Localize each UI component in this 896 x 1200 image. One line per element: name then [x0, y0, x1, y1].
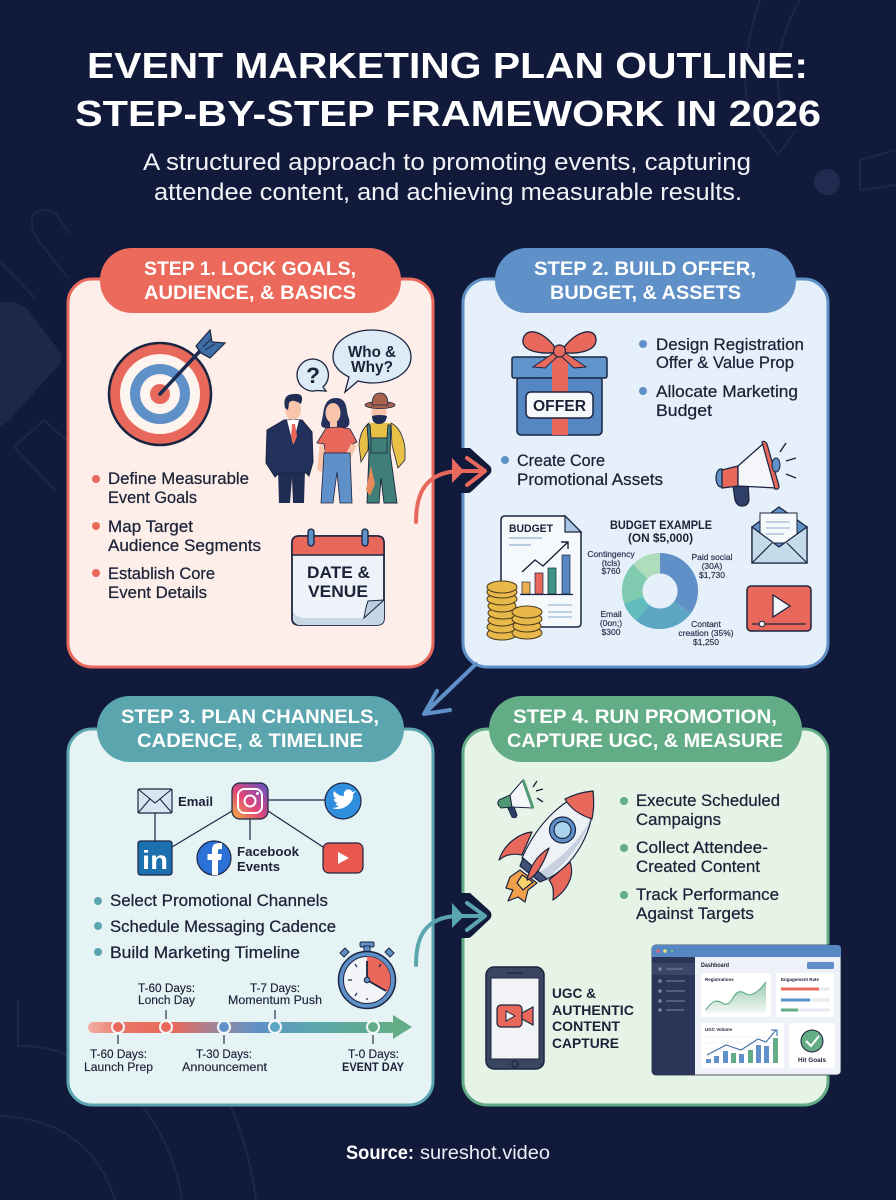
step 1 heading: AUDIENCE, & BASICS [144, 282, 356, 304]
bullet list: step 2 offer and budget: Budget [656, 401, 712, 420]
icon: stopwatch [338, 942, 396, 1008]
dashboard window: Dashboard [701, 962, 729, 969]
chart: marketing timeline: T-60 Days: [138, 983, 195, 995]
icon: calendar date and venue [292, 529, 384, 625]
icon: instagram [232, 783, 268, 819]
chart: budget donut: $300 [602, 627, 621, 637]
panel: step 4 [463, 696, 841, 1105]
text: ugc label [552, 985, 634, 1051]
chart: budget donut: Contant [691, 619, 722, 629]
icon: speech bubbles: Who & [348, 344, 396, 361]
panel: step 1 [68, 248, 433, 667]
icon: gift box offer [512, 332, 607, 435]
icon: target with arrow [109, 330, 225, 445]
chart: marketing timeline: T-7 Days: [250, 983, 300, 995]
step 2 heading [495, 248, 796, 313]
dashboard window [652, 945, 841, 1075]
icon: budget document with chart: BUDGET [509, 523, 553, 535]
text: ugc label: CAPTURE [552, 1035, 619, 1051]
bullet: create assets: Create Core [517, 451, 605, 470]
panel: step 2 [463, 248, 828, 667]
chart: marketing timeline [84, 983, 412, 1074]
bullet list: step 3 [94, 891, 336, 962]
chart: budget donut: creation (35%) [678, 628, 734, 638]
icon: small green megaphone [498, 780, 543, 818]
icon: rocket [499, 791, 594, 902]
step 2 heading: BUDGET, & ASSETS [550, 282, 741, 304]
icon: speech bubbles: ? [306, 363, 320, 388]
bullet list: step 2 offer and budget: Allocate Marketing [656, 382, 798, 401]
title: STEP-BY-STEP FRAMEWORK IN 2026 [75, 93, 821, 134]
step 4 heading [489, 696, 802, 762]
icon: facebook events [197, 841, 300, 875]
step 4 heading: STEP 4. RUN PROMOTION, [513, 706, 777, 728]
icon: gift box offer: OFFER [533, 398, 586, 415]
icon: email [138, 789, 213, 813]
dashboard card: engagement: Engagement Rate [781, 977, 820, 982]
icon: email: Email [178, 794, 213, 809]
bullet list: step 1: Audience Segments [108, 536, 261, 555]
chart: marketing timeline: Launch Prep [84, 1062, 153, 1074]
text: ugc label: CONTENT [552, 1018, 620, 1034]
chart: budget donut: Email [600, 609, 622, 619]
bullet list: step 4: Collect Attendee- [636, 838, 768, 857]
chart: budget donut: (30A) [702, 561, 723, 571]
bullet list: step 1: Event Goals [108, 488, 197, 507]
chart: marketing timeline: Announcement [182, 1062, 268, 1074]
step 1 heading: STEP 1. LOCK GOALS, [144, 258, 356, 280]
chart: marketing timeline: EVENT DAY [342, 1062, 404, 1074]
bullet list: step 1: Establish Core [108, 564, 215, 583]
title: EVENT MARKETING PLAN OUTLINE: [87, 45, 808, 86]
dashboard card: ugc volume [701, 1023, 784, 1068]
step 3 heading: STEP 3. PLAN CHANNELS, [121, 706, 379, 728]
bullet list: step 4: Created Content [636, 857, 760, 876]
chart: budget donut: Contingency [587, 549, 635, 559]
chart: budget donut: BUDGET EXAMPLE [610, 520, 712, 532]
source credit [346, 1143, 550, 1164]
icon: speech bubbles: Why? [351, 359, 393, 376]
subtitle: A structured approach to promoting events, capturing [143, 149, 751, 176]
chart: marketing timeline: T-60 Days: [90, 1049, 147, 1061]
step 1 heading [100, 248, 401, 313]
chart: marketing timeline: T-30 Days: [196, 1049, 252, 1061]
bullet list: step 2 offer and budget [639, 335, 804, 420]
source credit: sureshot.video [420, 1143, 550, 1164]
dashboard card: engagement [776, 973, 834, 1017]
chart: budget donut: $760 [602, 566, 621, 576]
dashboard card: registrations: Registrations [705, 977, 734, 982]
icon: budget document with chart [501, 516, 581, 627]
icon: calendar date and venue: VENUE [308, 583, 368, 601]
icon: linkedin: in [142, 845, 168, 875]
step 3 heading [97, 696, 404, 762]
icon: speech bubbles [297, 330, 411, 392]
bullet: create assets [501, 451, 663, 489]
dashboard card: hit goals [789, 1023, 835, 1068]
bullet list: step 3: Schedule Messaging Cadence [110, 917, 336, 936]
bullet list: step 4: Execute Scheduled [636, 791, 780, 810]
chart: budget donut: (0on;) [600, 618, 622, 628]
title [75, 45, 821, 134]
step 2 heading: STEP 2. BUILD OFFER, [534, 258, 756, 280]
dashboard card: hit goals: Hit Goals [798, 1057, 826, 1064]
source credit: Source: [346, 1143, 414, 1164]
bullet list: step 1: Event Details [108, 583, 207, 602]
icon: youtube [323, 843, 363, 873]
bullet list: step 4 [620, 791, 780, 923]
icon: facebook events: Events [237, 859, 280, 874]
chart: budget donut: $1,730 [699, 570, 725, 580]
chart: budget donut [587, 520, 734, 647]
chart: budget donut: (ON $5,000) [628, 533, 693, 545]
icon: coin stacks [487, 581, 542, 640]
bullet list: step 1: Map Target [108, 517, 193, 536]
chart: marketing timeline: Lonch Day [138, 995, 195, 1007]
icon: open envelope [752, 507, 807, 563]
icon: calendar date and venue: DATE & [307, 564, 370, 582]
bullet list: step 4: Against Targets [636, 904, 754, 923]
chart: marketing timeline: T-0 Days: [348, 1049, 399, 1061]
text: ugc label: UGC & [552, 985, 596, 1001]
icon: video player [747, 586, 811, 631]
bullet list: step 3: Select Promotional Channels [110, 891, 328, 910]
step 4 heading: CAPTURE UGC, & MEASURE [507, 730, 783, 752]
arrow: step 1 to step 2 [416, 448, 492, 522]
dashboard card: ugc volume: UGC Volume [705, 1027, 733, 1032]
bullet list: step 4: Campaigns [636, 810, 721, 829]
chart: budget donut: $1,250 [693, 637, 719, 647]
bullet: create assets: Promotional Assets [517, 470, 663, 489]
arrow: step 2 to step 3 [424, 664, 476, 714]
icon: phone capturing video [486, 967, 544, 1069]
bullet list: step 3: Build Marketing Timeline [110, 943, 300, 962]
panel: step 3 [68, 696, 433, 1105]
icon: linkedin [138, 841, 172, 875]
bullet list: step 1 [92, 469, 261, 602]
icon: facebook events: Facebook [237, 844, 300, 859]
arrow: step 3 to step 4 [416, 893, 492, 965]
text: ugc label: AUTHENTIC [552, 1002, 634, 1018]
illustration: three audience people [266, 393, 405, 503]
icon: megaphone [716, 441, 796, 506]
step 3 heading: CADENCE, & TIMELINE [137, 730, 363, 752]
bullet list: step 2 offer and budget: Offer & Value Prop [656, 353, 794, 372]
icon: twitter [325, 783, 361, 819]
subtitle: attendee content, and achieving measurable results. [154, 179, 742, 206]
chart: marketing timeline: Momentum Push [228, 995, 322, 1007]
chart: budget donut: (tcls) [602, 558, 620, 568]
diagram: promotional channel network [138, 783, 363, 875]
subtitle [143, 149, 751, 206]
bullet list: step 1: Define Measurable [108, 469, 249, 488]
dashboard card: registrations [701, 973, 771, 1017]
bullet list: step 4: Track Performance [636, 885, 779, 904]
chart: budget donut: Paid social [691, 552, 733, 562]
bullet list: step 2 offer and budget: Design Registration [656, 335, 804, 354]
